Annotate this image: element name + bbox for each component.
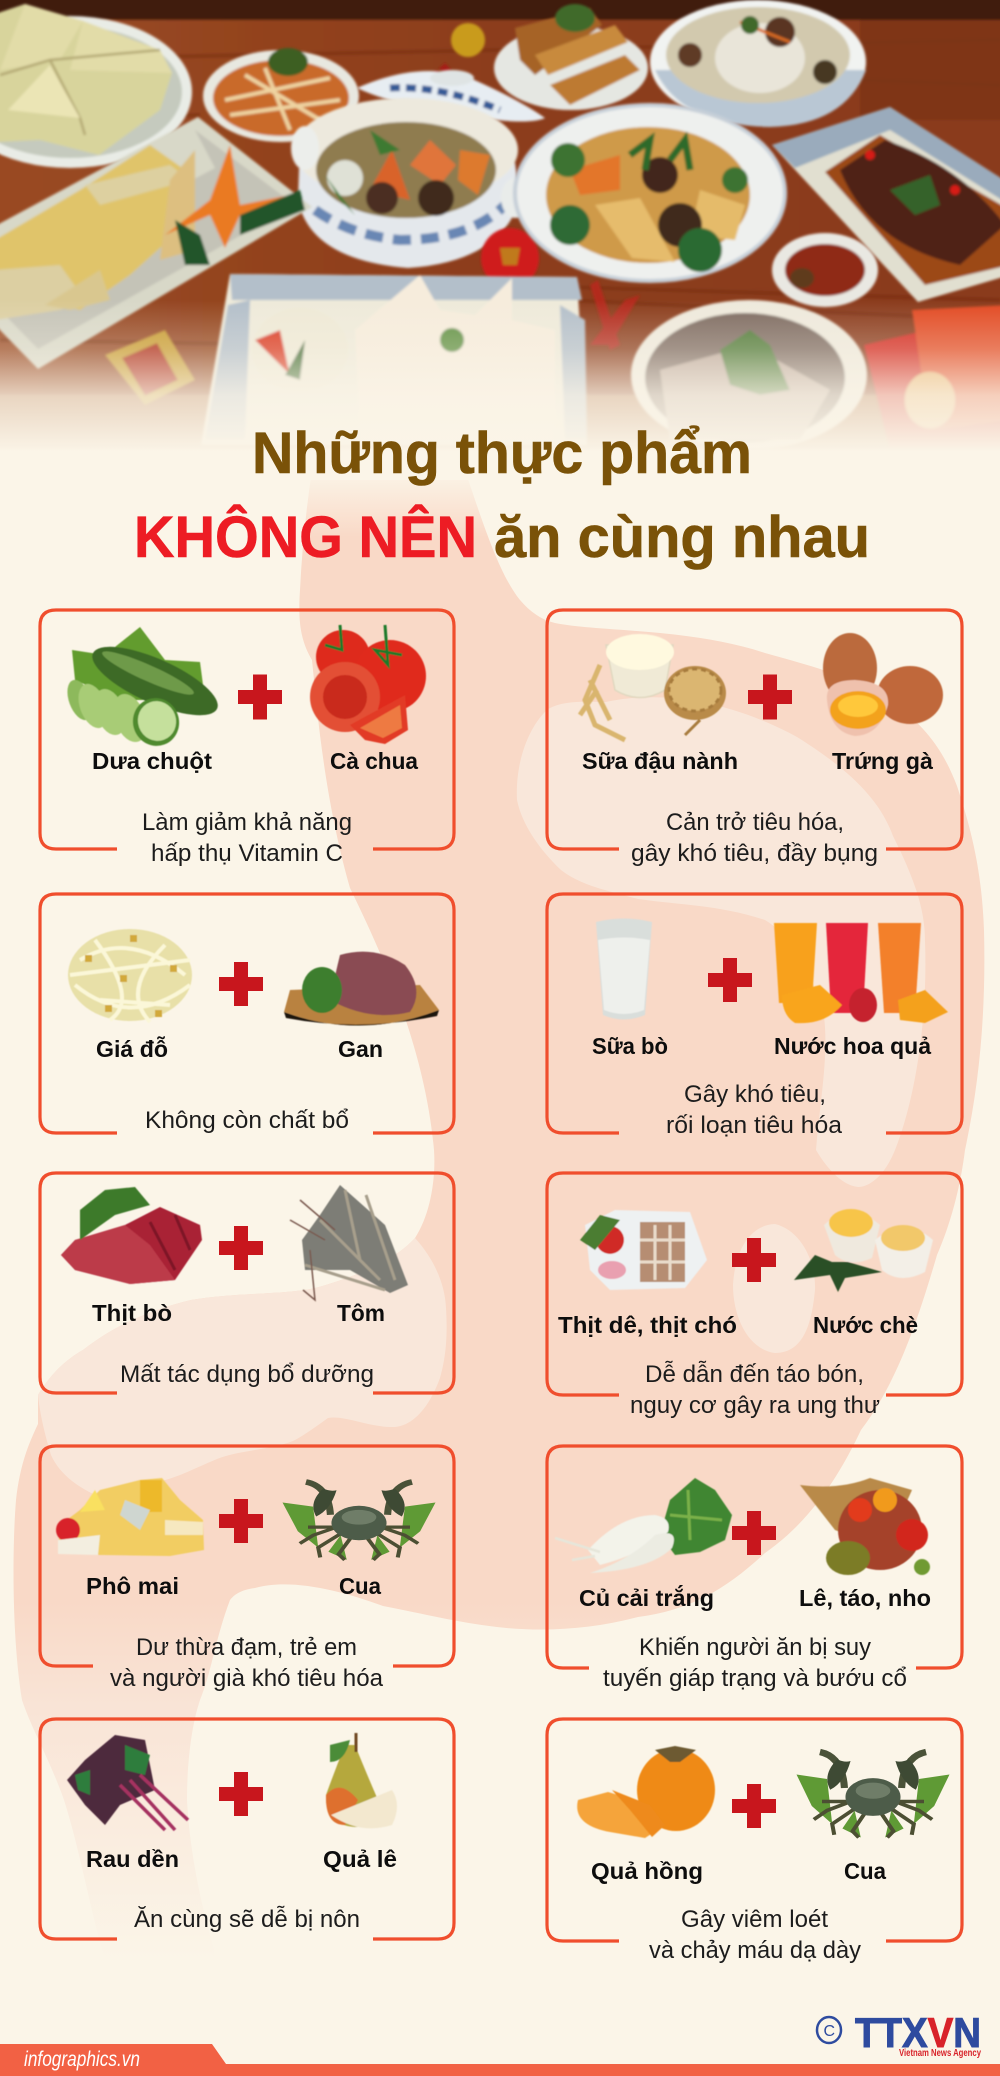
label: Gan — [338, 1036, 383, 1062]
effect text: Dư thừa đạm, trẻ em — [136, 1634, 357, 1661]
hero photo: festive food table — [0, 0, 1000, 480]
agency name: TTXVN — [855, 2009, 981, 2056]
card border — [40, 610, 454, 849]
wooden table — [0, 0, 1000, 450]
title line 2: ăn cùng nhau — [494, 505, 870, 570]
label: Thịt dê, thịt chó — [558, 1312, 737, 1338]
label: Củ cải trắng — [579, 1584, 714, 1611]
central plate: stir fry — [515, 105, 785, 281]
effect text: Gây khó tiêu, — [684, 1081, 826, 1108]
effect text: hấp thụ Vitamin C — [151, 840, 343, 867]
bowl: dipping sauce — [772, 233, 878, 307]
label: Lê, táo, nho — [799, 1585, 931, 1611]
icon: plus — [732, 1238, 776, 1282]
icon: persimmon — [577, 1746, 715, 1838]
card border — [40, 1446, 454, 1666]
icon: juice glasses — [774, 923, 948, 1023]
pot: shrimp soup — [291, 98, 529, 268]
icon: cheese — [56, 1478, 204, 1556]
icon: beef — [61, 1187, 202, 1284]
effect text: Khiến người ăn bị suy — [639, 1634, 872, 1661]
garlands — [382, 23, 485, 120]
panel: white radish + fruit — [547, 1446, 962, 1692]
icon: cucumber — [62, 627, 226, 752]
icon: tea cups — [794, 1209, 933, 1292]
panel: cucumber + tomato — [40, 610, 454, 867]
panel: cheese + crab — [40, 1446, 454, 1692]
effect text: Không còn chất bổ — [145, 1107, 349, 1134]
icon: soy milk and beans — [580, 634, 726, 740]
card border — [40, 894, 454, 1133]
label: Dưa chuột — [92, 748, 212, 774]
effect text: Ăn cùng sẽ dễ bị nôn — [134, 1906, 360, 1933]
label: Cua — [339, 1573, 381, 1599]
copyright mark: C — [824, 2023, 835, 2040]
panel: cow milk + fruit juice — [547, 894, 962, 1139]
icon: plus — [219, 962, 263, 1006]
effect text: Cản trở tiêu hóa, — [666, 809, 844, 836]
background swirl shape — [14, 470, 984, 1960]
effect text: nguy cơ gây ra ung thư — [630, 1392, 880, 1419]
icon: pear — [326, 1733, 397, 1828]
logo: TTXVN — [817, 2009, 981, 2059]
icon: plus — [219, 1772, 263, 1816]
label: Phô mai — [86, 1573, 179, 1599]
icon: plus — [219, 1499, 263, 1543]
label: Cà chua — [330, 748, 418, 774]
icon: meat plate — [580, 1210, 707, 1290]
copyright mark — [817, 2017, 841, 2043]
icon: plus — [748, 674, 792, 720]
effect text — [603, 1634, 907, 1692]
effect text: Mất tác dụng bổ dưỡng — [120, 1361, 374, 1388]
bowl: steamed pork — [631, 300, 867, 450]
rectangular plate: boiled chicken — [0, 117, 312, 369]
title red emphasis: KHÔNG NÊN — [134, 505, 477, 570]
effect text — [142, 809, 352, 867]
icon: plus — [708, 958, 752, 1002]
icon: liver on board — [284, 952, 439, 1026]
pot lid — [357, 70, 545, 122]
card border — [547, 1446, 962, 1668]
card border — [40, 1173, 454, 1393]
icon: amaranth greens — [67, 1735, 188, 1830]
plate: spring rolls — [494, 4, 648, 110]
icon: bean sprouts — [68, 929, 192, 1022]
icon: plus — [219, 1226, 263, 1270]
label: Sữa bò — [592, 1033, 668, 1059]
effect text — [666, 1081, 842, 1139]
icon: eggs — [823, 633, 943, 736]
square plate: pork sausage — [201, 274, 587, 445]
red lantern — [481, 228, 539, 288]
red envelopes — [864, 305, 1000, 450]
fade of photo into the page — [0, 300, 1000, 480]
label: Tôm — [337, 1300, 385, 1326]
effect text: Gây viêm loét — [681, 1906, 828, 1933]
effect text — [649, 1906, 862, 1964]
icon: plus — [732, 1511, 776, 1555]
panel: bean sprouts + liver — [40, 894, 454, 1134]
label: Nước chè — [813, 1312, 918, 1338]
panel: amaranth + pear — [40, 1719, 454, 1939]
card border — [547, 1173, 962, 1395]
effect text: gây khó tiêu, đầy bụng — [631, 840, 878, 867]
title line 1: Những thực phẩm — [252, 421, 752, 486]
label: Thịt bò — [92, 1300, 172, 1326]
panel: soy milk + eggs — [547, 610, 962, 867]
plate: sticky rice cake — [0, 4, 192, 168]
red packet — [105, 280, 640, 405]
icon: shrimp — [290, 1185, 408, 1300]
rectangular plate: braised fish — [772, 107, 1000, 302]
icon: crab — [282, 1482, 436, 1560]
effect text: tuyến giáp trạng và bướu cổ — [603, 1665, 907, 1692]
label: Quả lê — [323, 1846, 397, 1872]
panel: goat and dog meat + tea — [547, 1173, 962, 1419]
effect text: Dễ dẫn đến táo bón, — [645, 1361, 864, 1388]
plate: carrot salad — [203, 48, 359, 142]
effect text: và chảy máu dạ dày — [649, 1937, 862, 1964]
panel: beef + shrimp — [40, 1173, 454, 1393]
icon: white radish — [555, 1478, 732, 1573]
site name: infographics.vn — [24, 2048, 140, 2071]
icon: tomato — [310, 625, 426, 744]
icon: plus — [238, 674, 282, 720]
label: Rau dền — [86, 1846, 179, 1872]
icon: glass of milk — [596, 918, 652, 1020]
effect text — [631, 809, 878, 867]
label: Nước hoa quả — [774, 1033, 931, 1059]
effect text: Làm giảm khả năng — [142, 809, 352, 836]
label: Giá đỗ — [96, 1035, 168, 1062]
card border — [40, 1719, 454, 1939]
label: Sữa đậu nành — [582, 748, 738, 774]
icon: plus — [732, 1784, 776, 1828]
card border — [547, 894, 962, 1133]
title — [134, 421, 870, 570]
icon: cornucopia of fruit — [800, 1478, 930, 1575]
label: Trứng gà — [832, 748, 933, 774]
panel: persimmon + crab — [547, 1719, 962, 1964]
label: Quả hồng — [591, 1858, 703, 1884]
footer band — [0, 2044, 1000, 2076]
effect text: và người già khó tiêu hóa — [110, 1665, 383, 1692]
effect text — [630, 1361, 880, 1419]
effect text: rối loạn tiêu hóa — [666, 1112, 842, 1139]
bowl: chicken soup — [650, 0, 866, 127]
card border — [547, 1719, 962, 1941]
card border — [547, 610, 962, 849]
icon: crab — [796, 1752, 950, 1838]
effect text — [110, 1634, 383, 1692]
label: Cua — [844, 1858, 886, 1884]
